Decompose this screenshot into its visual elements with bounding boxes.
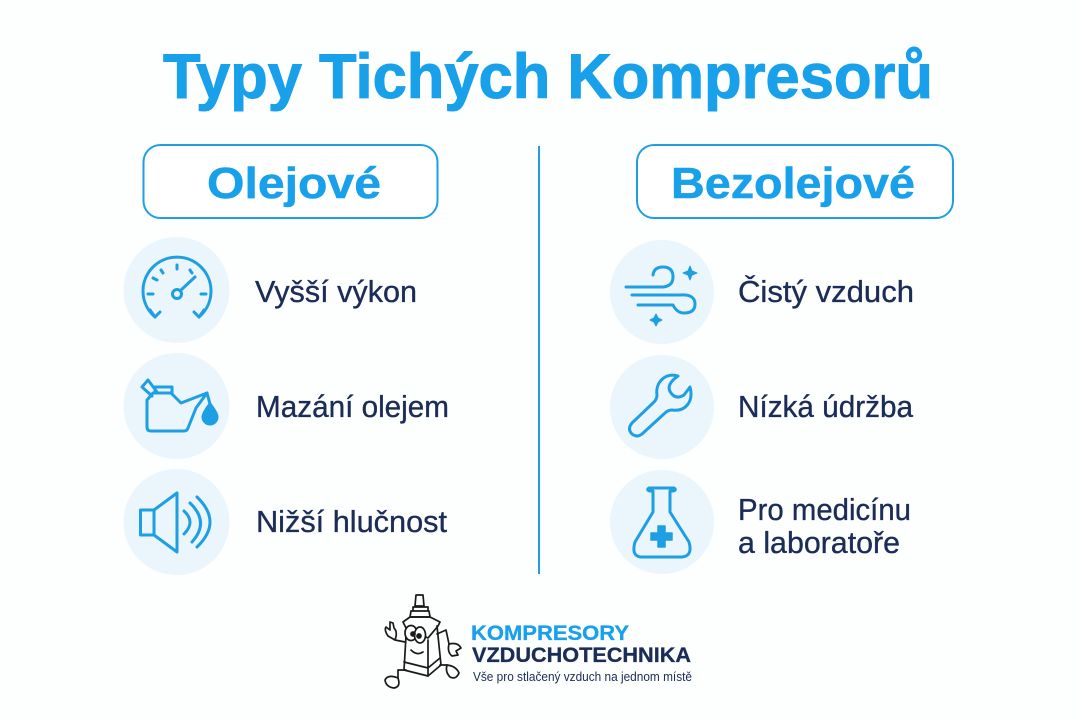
heading: Bezolejové: Bezolejové bbox=[671, 159, 915, 208]
item: Mazání olejem bbox=[124, 353, 449, 459]
icon: speedometer gauge bbox=[143, 257, 211, 317]
logo: VZDUCHOTECHNIKA bbox=[472, 644, 691, 667]
icon: compressor mascot bbox=[385, 595, 461, 688]
item: Nízká údržba: Nízká údržba bbox=[738, 389, 914, 424]
item: Nižší hlučnost bbox=[124, 469, 447, 575]
icon: wrench bbox=[630, 375, 691, 436]
panel: Bezolejové column bbox=[610, 145, 953, 574]
divider bbox=[538, 146, 540, 574]
icon: speaker bbox=[140, 493, 210, 552]
item: Čistý vzduch: Čistý vzduch bbox=[738, 274, 914, 309]
heading: Olejové: Olejové bbox=[207, 159, 381, 208]
heading: Bezolejové bbox=[637, 145, 953, 218]
icon: flask with cross bbox=[634, 488, 690, 557]
item: Pro medicínu a laboratoře: Pro medicínu bbox=[738, 492, 911, 527]
panel: Olejové column bbox=[124, 145, 449, 575]
item: Mazání olejem: Mazání olejem bbox=[256, 389, 449, 424]
item: Pro medicínu a laboratoře bbox=[610, 470, 911, 574]
logo bbox=[385, 595, 692, 688]
heading: Olejové bbox=[144, 145, 438, 218]
item: Nízká údržba bbox=[610, 355, 914, 459]
icon: oil can with drop bbox=[142, 380, 217, 431]
item: Vyšší výkon: Vyšší výkon bbox=[255, 274, 417, 309]
brand name: KOMPRESORY bbox=[471, 622, 629, 645]
item: Nižší hlučnost: Nižší hlučnost bbox=[256, 504, 447, 539]
tagline: Vše pro stlačený vzduch na jednom místě bbox=[473, 670, 692, 684]
title: Typy Tichých Kompresorů bbox=[163, 42, 933, 112]
icon: wind with sparkles bbox=[626, 266, 697, 326]
item: Pro medicínu a laboratoře: a laboratoře bbox=[738, 525, 900, 560]
item: Čistý vzduch bbox=[610, 240, 914, 344]
item: Vyšší výkon bbox=[124, 237, 417, 343]
